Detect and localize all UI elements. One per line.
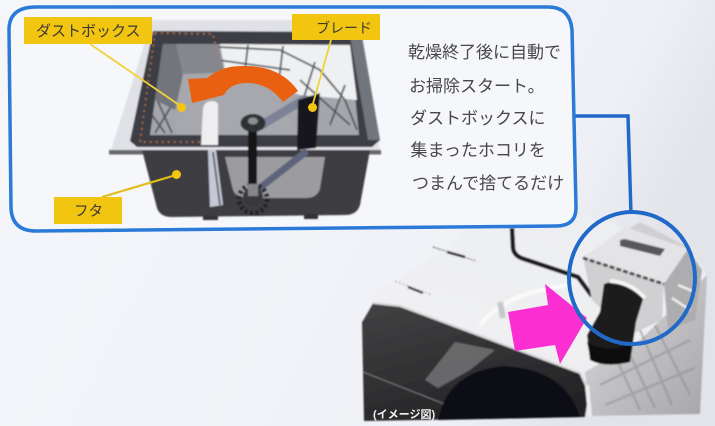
label: blade: ブレード (316, 20, 372, 36)
label: blade (292, 14, 380, 40)
door panel (362, 303, 589, 421)
text block: description: 乾燥終了後に自動で (408, 43, 561, 62)
text block: description: つまんで捨てるだけ (412, 174, 564, 193)
gear (239, 185, 267, 213)
circle highlight (569, 212, 695, 344)
illustration: washing machine (362, 200, 707, 421)
top slots (433, 247, 476, 261)
text block: description (408, 43, 564, 193)
caption: image note: (イメージ図) (373, 408, 435, 421)
label: lid (54, 197, 122, 224)
left blade and plate (201, 101, 218, 145)
duct hose (587, 282, 644, 365)
text block: description: ダストボックスに (410, 109, 546, 128)
upper frame (130, 31, 380, 147)
glass plate (110, 20, 380, 153)
inner window (150, 44, 359, 135)
shaft (248, 128, 257, 186)
wire harness (480, 285, 570, 325)
top port (505, 200, 520, 222)
arrow: orange rotation (188, 66, 298, 103)
text block: description: お掃除スタート。 (409, 77, 545, 96)
text block: description: 集まったホコリを (410, 141, 546, 160)
arrow: pink (508, 284, 587, 364)
label: dust box: ダストボックス (36, 23, 141, 40)
leader lines (90, 40, 331, 197)
connector line (575, 116, 631, 214)
label: dust box (24, 17, 152, 44)
label: lid: フタ (74, 203, 103, 220)
dust unit box (583, 222, 686, 335)
illustration: dust box (109, 20, 381, 220)
lower cover (142, 150, 370, 217)
dotted dust box outline (140, 33, 219, 142)
blade arm (258, 94, 311, 130)
black tube (512, 228, 592, 296)
panel: dust box explanation (9, 7, 576, 231)
